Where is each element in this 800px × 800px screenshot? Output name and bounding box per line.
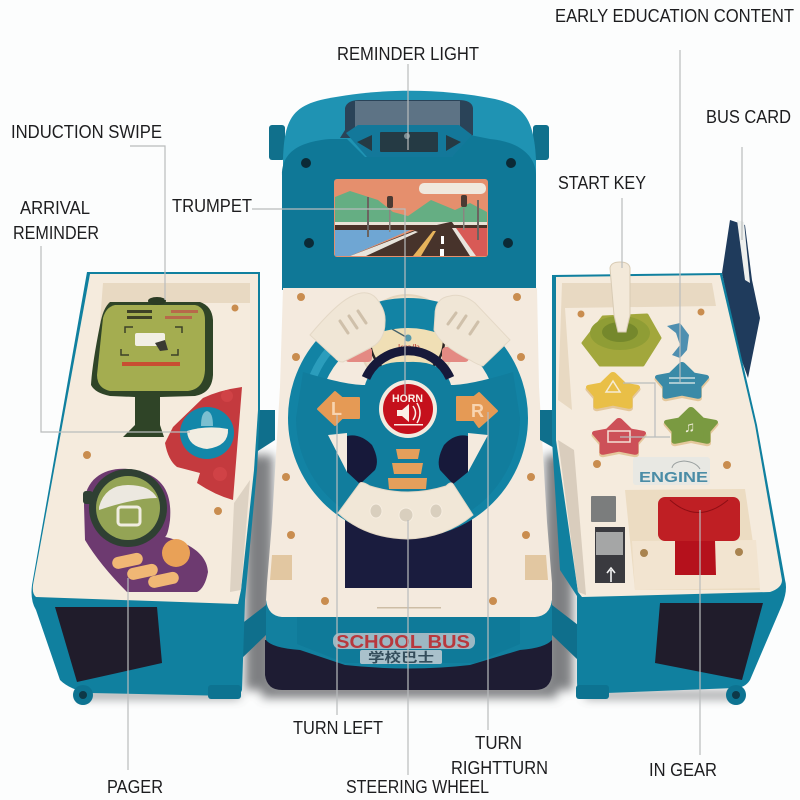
engine badge: ENGINE: [639, 469, 708, 486]
reminder light housing: [340, 100, 473, 157]
steering wheel: [296, 293, 520, 539]
wheel stubs: [73, 685, 241, 705]
roof shell: [283, 91, 536, 290]
engine badge: [633, 457, 710, 486]
R button: [457, 393, 497, 427]
front bumper: [266, 600, 552, 668]
arrow sticker: [667, 323, 689, 358]
speedometer: km/h: [398, 343, 420, 352]
school bus logo: 学校巴士: [368, 650, 434, 665]
leader lines: [41, 50, 742, 775]
label: turn left: TURN LEFT: [293, 718, 383, 738]
speedometer: [345, 295, 469, 389]
wheel hub: [296, 362, 520, 530]
horn button: [379, 380, 437, 438]
label: turn right: TURN: [475, 733, 522, 753]
label: trumpet: TRUMPET: [172, 196, 252, 216]
label: arrival reminder: REMINDER: [13, 223, 99, 243]
label: steering wheel: STEERING WHEEL: [346, 777, 489, 797]
left cream interior: [33, 274, 258, 604]
upper left grip: [310, 293, 385, 362]
start key: [583, 262, 660, 365]
panel: left door: [32, 272, 260, 705]
gear lever: [640, 497, 743, 575]
centre cream deck: [266, 288, 552, 617]
school bus logo: SCHOOL BUS: [336, 632, 470, 652]
star buttons: [589, 364, 715, 454]
label: induction swipe: INDUCTION SWIPE: [11, 122, 162, 142]
orange bars: [388, 449, 427, 489]
bottom grip: [338, 482, 473, 539]
left shell: [32, 272, 260, 696]
R button: R: [471, 401, 484, 421]
cream and dark gaps: [328, 433, 488, 484]
arrival reminder button: [165, 387, 242, 500]
label: turn right: RIGHTTURN: [451, 758, 548, 778]
label: arrival reminder: [13, 198, 99, 243]
right window: [655, 603, 763, 680]
ground shadows: [80, 455, 735, 698]
school bus logo: [333, 632, 475, 665]
right cream interior: [556, 275, 782, 597]
label: turn right: [451, 733, 548, 778]
label: arrival reminder: ARRIVAL: [20, 198, 90, 218]
side mirrors: [269, 125, 549, 160]
label: start key: START KEY: [558, 173, 646, 193]
toy bus: centre body: [240, 91, 578, 690]
label: bus card: BUS CARD: [706, 107, 791, 127]
L button: [318, 392, 359, 425]
L button: L: [331, 399, 342, 419]
screw holes: [301, 158, 516, 248]
upper right grip: [434, 295, 510, 366]
rear panel: [282, 135, 536, 290]
label: pager: PAGER: [107, 777, 163, 797]
star buttons: ♫: [684, 419, 695, 436]
gear tray: [625, 489, 760, 590]
label: in gear: IN GEAR: [649, 760, 717, 780]
right shell: [552, 273, 786, 694]
gear indicator: [591, 496, 625, 583]
bus card: [722, 220, 760, 378]
induction swipe card: [91, 297, 213, 437]
panel: right door: [552, 220, 786, 705]
road screen: [334, 179, 488, 257]
label: reminder light: REMINDER LIGHT: [337, 44, 479, 64]
left window: [55, 607, 162, 682]
side hinges: [240, 410, 578, 660]
pager: [83, 469, 208, 592]
dark base: [265, 640, 552, 690]
wheel stubs: [576, 685, 746, 705]
horn button: HORN: [392, 393, 423, 405]
wheel ring: [303, 313, 513, 523]
